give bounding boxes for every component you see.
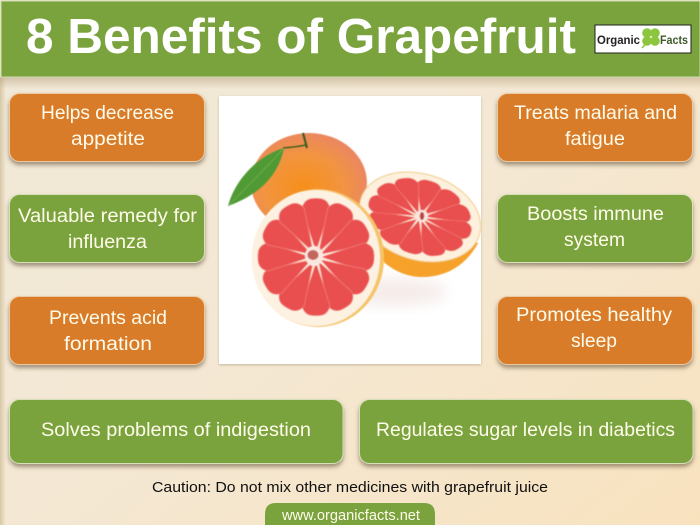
panel: prevents acid formation: Prevents acid	[49, 308, 167, 329]
panel: solves problems of indigestion: Solves problems of indigestion	[41, 420, 311, 441]
panel: helps decrease appetite	[10, 94, 204, 162]
logo: Organic Facts: Facts	[660, 33, 688, 47]
footer pill: website: www.organicfacts.net	[281, 508, 420, 524]
icon: clover	[642, 28, 660, 48]
panel: promotes healthy sleep: sleep	[571, 331, 617, 352]
shadow under fruit	[343, 278, 447, 306]
panel: promotes healthy sleep: Promotes healthy	[516, 305, 673, 326]
panel: prevents acid formation	[10, 296, 204, 364]
panel: valuable remedy for influenza: Valuable remedy for	[18, 206, 198, 227]
title: 8 Benefits of Grapefruit	[26, 10, 576, 64]
panel: promotes healthy sleep	[498, 296, 692, 364]
header banner	[1, 1, 700, 77]
panel: helps decrease appetite: Helps decrease	[41, 103, 174, 124]
left grapefruit half	[252, 189, 384, 327]
panel: boosts immune system	[498, 194, 692, 262]
panel: treats malaria and fatigue: fatigue	[565, 129, 625, 150]
panel: prevents acid formation: formation	[64, 334, 152, 355]
photo panel: grapefruit	[219, 96, 492, 364]
panel: treats malaria and fatigue	[498, 94, 692, 162]
panel: helps decrease appetite: appetite	[71, 129, 145, 150]
logo: Organic Facts	[595, 25, 691, 53]
logo: Organic Facts: Organic	[597, 33, 640, 47]
panel: treats malaria and fatigue: Treats malaria and	[514, 103, 677, 124]
icon: leaf and stem	[228, 133, 307, 206]
panel: valuable remedy for influenza	[10, 194, 204, 262]
panel: regulates sugar levels in diabetics: Regulates sugar levels in diabetics	[376, 420, 675, 441]
right grapefruit half	[348, 158, 492, 277]
footer pill: website	[265, 503, 435, 525]
panel: solves problems of indigestion	[10, 400, 343, 464]
caution note: Caution: Do not mix other medicines with grapefruit juice	[152, 479, 548, 496]
panel: boosts immune system: system	[564, 230, 625, 251]
panel: valuable remedy for influenza: influenza	[68, 232, 147, 253]
whole orange	[251, 133, 367, 233]
panel: boosts immune system: Boosts immune	[527, 204, 664, 225]
panel: regulates sugar levels in diabetics	[360, 400, 693, 464]
